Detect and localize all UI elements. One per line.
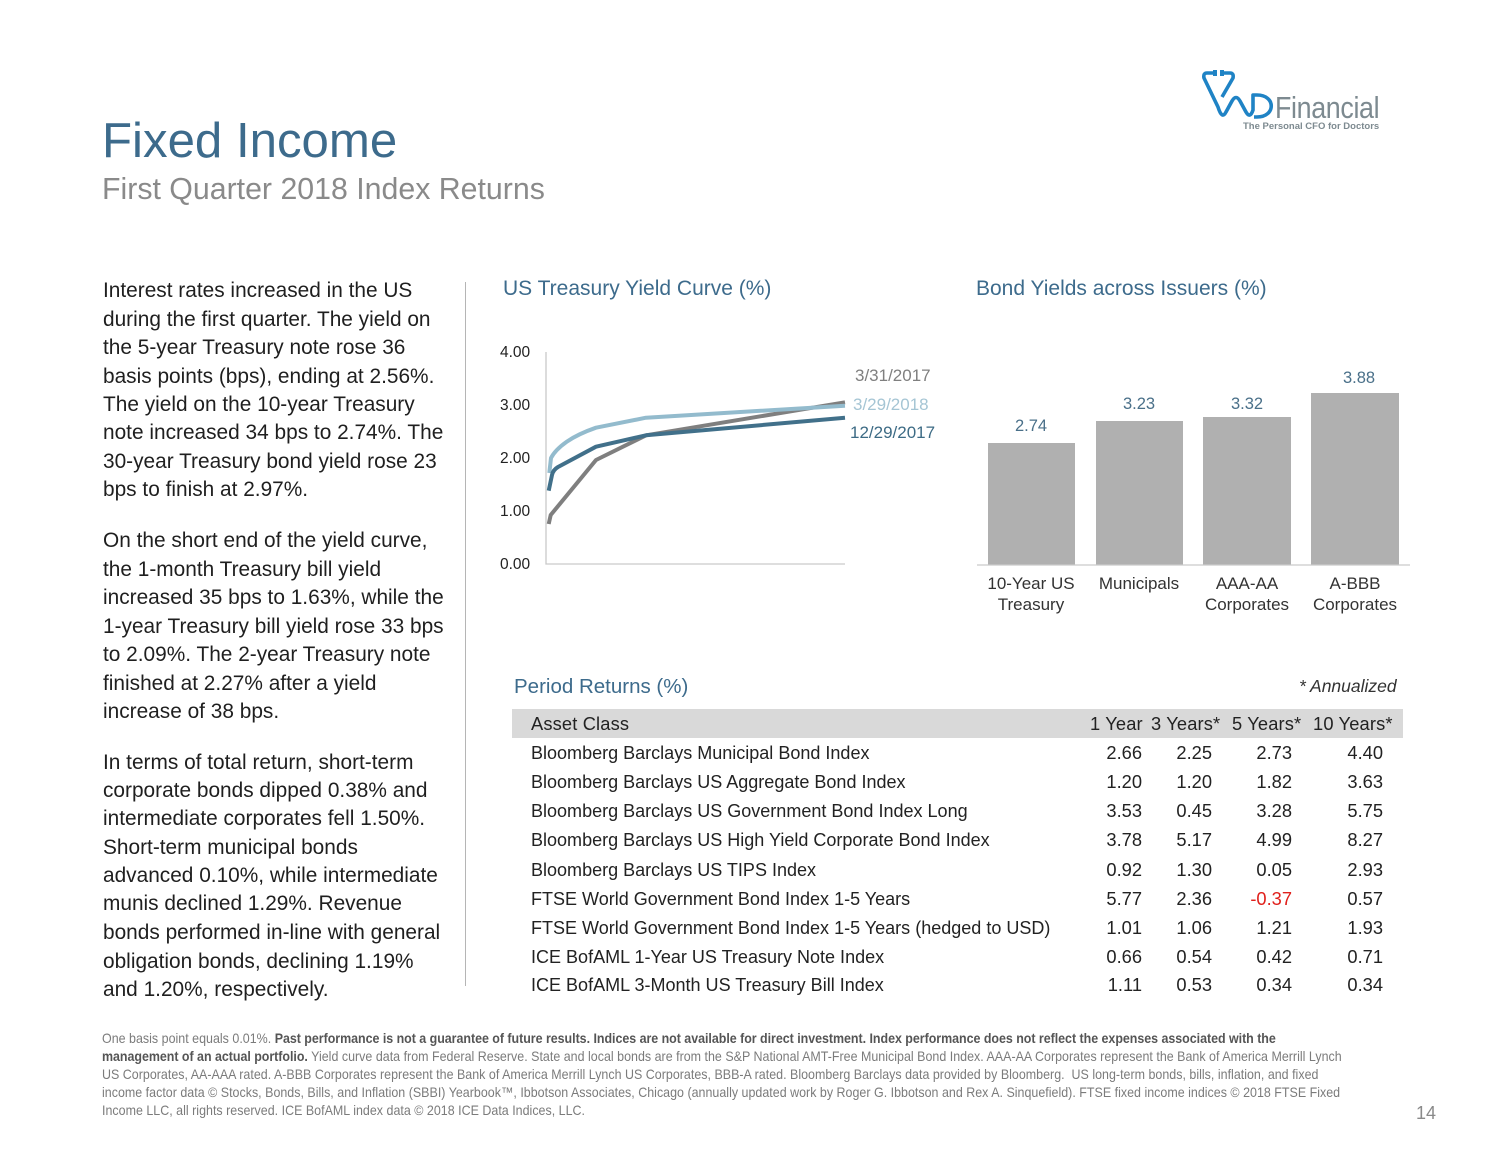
returns table: 3.63	[1347, 771, 1383, 792]
returns table: 0.45	[1176, 800, 1212, 821]
commentary text: advanced 0.10%, while intermediate	[103, 864, 438, 887]
commentary text: basis points (bps), ending at 2.56%.	[103, 364, 434, 388]
returns table: 0.66	[1106, 946, 1142, 967]
returns table: 0.57	[1347, 888, 1383, 909]
annualized note: * Annualized	[1299, 676, 1397, 696]
returns table: 1.30	[1176, 859, 1212, 880]
returns table: 0.34	[1256, 974, 1292, 995]
returns table: 2.66	[1106, 742, 1142, 763]
commentary text: bonds performed in-line with general	[103, 921, 440, 944]
bar chart: bond yields: 3.88	[1343, 369, 1375, 387]
returns table: 2.25	[1176, 742, 1212, 763]
returns table: 0.92	[1106, 859, 1142, 880]
footnote: One basis point equals 0.01%. Past performance is not a guarantee of future results. Indices are not available for direct investment. Index performance does not reflect the expenses associated with the	[102, 1030, 1276, 1046]
returns table: Bloomberg Barclays US TIPS Index	[531, 860, 816, 880]
bar chart: bond yields: AAA-AA	[1216, 574, 1279, 593]
title: Fixed Income	[102, 113, 397, 168]
heading: US Treasury Yield Curve: US Treasury Yield Curve (%)	[503, 277, 771, 300]
returns table: 4.99	[1256, 829, 1292, 850]
heading: Period Returns: Period Returns (%)	[514, 675, 688, 698]
footnote: Income LLC, all rights reserved. ICE BofAML index data © 2018 ICE Data Indices, LLC.	[102, 1102, 585, 1118]
returns table: 0.54	[1176, 946, 1212, 967]
commentary text: and 1.20%, respectively.	[103, 978, 329, 1001]
bar chart: bond yields	[977, 369, 1410, 614]
returns table: Bloomberg Barclays US High Yield Corporate Bond Index	[531, 830, 990, 850]
returns table	[512, 709, 1403, 995]
line: 12/29/2017	[549, 418, 845, 491]
returns table: 4.40	[1347, 742, 1383, 763]
heading: Bond Yields across Issuers: Bond Yields across Issuers (%)	[976, 277, 1267, 300]
returns table: 3.28	[1256, 800, 1292, 821]
footnote: US Corporates, AA-AAA rated. A-BBB Corporates represent the Bank of America Merrill Lynch US Corporates, BBB-A rated. Bloomberg Barclays data provided by Bloomberg. US long-term bonds, bills, inflation, and fixed	[102, 1066, 1318, 1082]
returns table: 3 Years*	[1151, 712, 1220, 734]
commentary text: Short-term municipal bonds	[103, 836, 358, 858]
line chart: yield curve	[500, 344, 935, 573]
logo: Financial	[1275, 91, 1379, 125]
bar chart: bond yields: 10-Year US	[987, 574, 1075, 593]
commentary text: finished at 2.27% after a yield	[103, 672, 376, 694]
returns table: 2.93	[1347, 859, 1383, 880]
commentary text: 1-year Treasury bill yield rose 33 bps	[103, 614, 444, 638]
returns table: Bloomberg Barclays US Aggregate Bond Index	[531, 772, 906, 792]
line: 3/29/2018	[549, 406, 845, 473]
bar chart: bond yields: Treasury	[998, 595, 1065, 614]
bar chart: bond yields: 3.23	[1123, 395, 1155, 413]
returns table: 1.11	[1108, 974, 1142, 995]
line chart: yield curve: 3.00	[500, 397, 531, 414]
returns table: 0.71	[1347, 946, 1383, 967]
returns table: 2.36	[1176, 888, 1212, 909]
bar chart: bond yields: A-BBB	[1329, 574, 1381, 593]
footnote: management of an actual portfolio. Yield curve data from Federal Reserve. State and local bonds are from the S&P National AMT-Free Municipal Bond Index. AAA-AA Corporates represent the Bank of America Merrill Lynch	[102, 1048, 1342, 1064]
series labels	[850, 366, 935, 442]
line chart: yield curve: 0.00	[500, 556, 531, 573]
commentary text: the 5-year Treasury note rose 36	[103, 336, 405, 359]
line: 3/31/2017	[549, 402, 845, 524]
bar chart: bond yields: Corporates	[1205, 595, 1289, 614]
returns table: 1.93	[1347, 917, 1383, 938]
returns table: Bloomberg Barclays US Government Bond Index Long	[531, 801, 968, 821]
commentary text	[103, 279, 444, 1001]
returns table: FTSE World Government Bond Index 1-5 Years	[531, 889, 910, 909]
returns table: 1.20	[1176, 771, 1212, 792]
commentary text: On the short end of the yield curve,	[103, 529, 427, 552]
commentary text: increase of 38 bps.	[103, 700, 279, 723]
commentary text: Interest rates increased in the US	[103, 279, 412, 302]
commentary text: the 1-month Treasury bill yield	[103, 558, 381, 580]
returns table: 1.06	[1176, 917, 1212, 938]
commentary text: to 2.09%. The 2-year Treasury note	[103, 643, 431, 666]
commentary text: In terms of total return, short-term	[103, 751, 413, 774]
returns table: Bloomberg Barclays Municipal Bond Index	[531, 743, 869, 763]
footnote: income factor data © Stocks, Bonds, Bills, and Inflation (SBBI) Yearbook™, Ibbotson Associates, Chicago (annually updated work by Roger G. Ibbotson and Rex A. Sinquefield). FTSE fixed income indices © 2018 FTSE Fixed	[102, 1084, 1340, 1100]
returns table: 0.05	[1256, 859, 1292, 880]
commentary text: bps to finish at 2.97%.	[103, 478, 308, 501]
commentary text: increased 35 bps to 1.63%, while the	[103, 586, 444, 609]
returns table: 0.53	[1176, 974, 1212, 995]
bar chart: bond yields: Municipals	[1099, 574, 1179, 593]
commentary text: during the first quarter. The yield on	[103, 308, 431, 330]
returns table: 0.34	[1347, 974, 1383, 995]
commentary text: intermediate corporates fell 1.50%.	[103, 807, 425, 830]
returns table: 1.21	[1256, 917, 1292, 938]
returns table: 1 Year	[1090, 712, 1143, 734]
returns table: Asset Class	[531, 712, 629, 734]
line chart: yield curve: 4.00	[500, 344, 531, 361]
subtitle: First Quarter 2018 Index Returns	[102, 173, 545, 206]
page number: 14	[1416, 1103, 1436, 1123]
commentary text: The yield on the 10-year Treasury	[103, 392, 415, 416]
returns table: 1.20	[1106, 771, 1142, 792]
bar chart: bond yields: 2.74	[1015, 417, 1047, 435]
logo: The Personal CFO for Doctors	[1243, 121, 1379, 132]
returns table: 1.01	[1106, 917, 1142, 938]
returns table: 5.77	[1106, 888, 1142, 909]
returns table: FTSE World Government Bond Index 1-5 Years (hedged to USD)	[531, 918, 1050, 938]
returns table: 2.73	[1256, 742, 1292, 763]
returns table: 5.75	[1347, 800, 1383, 821]
returns table: 5.17	[1176, 829, 1212, 850]
line chart: yield curve: 1.00	[500, 503, 531, 520]
commentary text: corporate bonds dipped 0.38% and	[103, 779, 427, 802]
series labels: 3/31/2017	[855, 366, 931, 385]
returns table: 3.78	[1106, 829, 1142, 850]
returns table: 10 Years*	[1313, 712, 1393, 734]
bar chart: bond yields: 3.32	[1231, 395, 1263, 413]
line chart: yield curve: 2.00	[500, 450, 531, 467]
returns table: -0.37	[1250, 888, 1292, 909]
bar chart: bond yields: Corporates	[1313, 595, 1397, 614]
footnote	[102, 1030, 1342, 1118]
series labels: 12/29/2017	[850, 423, 935, 442]
returns table: 1.82	[1256, 771, 1292, 792]
returns table: 3.53	[1106, 800, 1142, 821]
commentary text: 30-year Treasury bond yield rose 23	[103, 450, 437, 472]
logo	[1202, 70, 1379, 132]
returns table: 0.42	[1256, 946, 1292, 967]
returns table: ICE BofAML 3-Month US Treasury Bill Index	[531, 975, 884, 995]
returns table: 5 Years*	[1232, 712, 1301, 734]
series labels: 3/29/2018	[853, 395, 929, 414]
commentary text: munis declined 1.29%. Revenue	[103, 892, 402, 915]
returns table: ICE BofAML 1-Year US Treasury Note Index	[531, 947, 884, 967]
commentary text: note increased 34 bps to 2.74%. The	[103, 421, 443, 444]
commentary text: obligation bonds, declining 1.19%	[103, 950, 414, 973]
returns table: 8.27	[1347, 829, 1383, 850]
